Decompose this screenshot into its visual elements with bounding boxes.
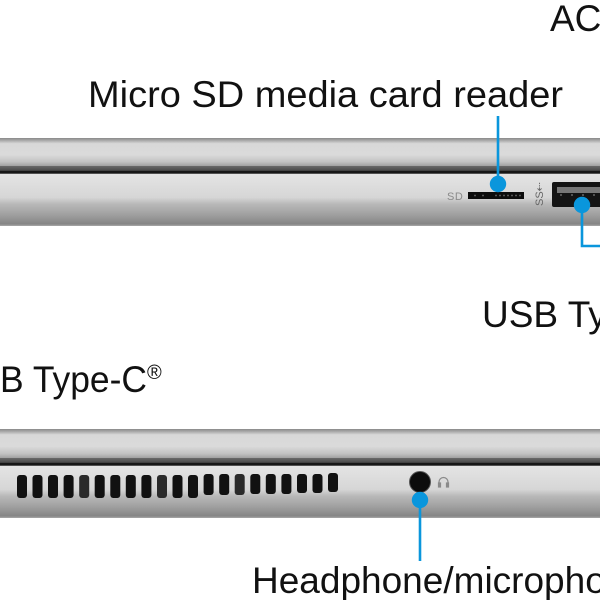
top laptop hinge gap bbox=[0, 166, 600, 174]
bottom laptop hinge gap bbox=[0, 458, 600, 466]
callout: micro SD pointer bbox=[490, 116, 506, 192]
label: Micro SD media card reader: Micro SD media card reader bbox=[88, 74, 563, 115]
USB Type-A port bbox=[552, 182, 600, 207]
label: USB Type-C partial: ® bbox=[147, 362, 162, 384]
micro SD slot bbox=[468, 192, 524, 199]
top laptop lid bbox=[0, 138, 600, 166]
top laptop base bbox=[0, 174, 600, 226]
bottom laptop base bbox=[0, 466, 600, 518]
bottom laptop lid bbox=[0, 429, 600, 458]
icon: headphones bbox=[438, 478, 448, 487]
callout: USB pointer bbox=[574, 197, 600, 246]
headphone jack bbox=[410, 472, 430, 492]
laptop side view: top bbox=[0, 138, 600, 226]
USB symbol: SS⇠ bbox=[534, 182, 546, 206]
callout: headphone pointer bbox=[412, 492, 428, 561]
SD label: SD bbox=[447, 191, 463, 203]
label: USB Type-C partial: B Type-C bbox=[0, 359, 147, 400]
vent slots bbox=[17, 473, 338, 498]
laptop side view: bottom bbox=[0, 429, 600, 518]
